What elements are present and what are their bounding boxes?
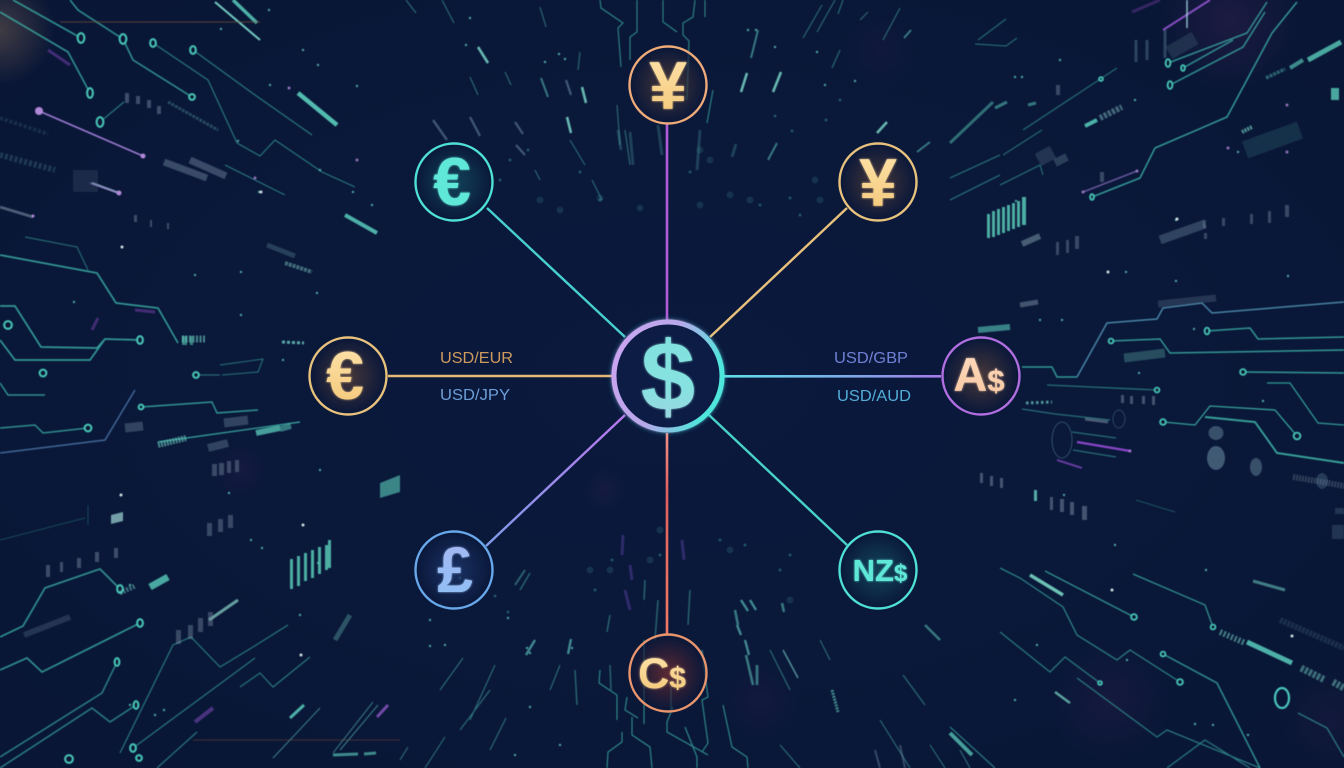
euro symbol: € [433, 144, 471, 220]
label: USD/JPY: USD/JPY [440, 387, 510, 404]
connector: right A$ [724, 375, 941, 378]
background chart bars: right [980, 85, 1344, 539]
hub symbol: $ [641, 321, 695, 431]
NZ$ symbol: NZ$ [853, 553, 908, 588]
perspective data streaks: top [406, 0, 930, 200]
label: USD/AUD: USD/AUD [837, 388, 911, 405]
connector: left euro [388, 375, 612, 377]
background circuit traces: right [950, 2, 1344, 768]
connector: bottom-left pound [486, 415, 625, 546]
background circuit traces: left [0, 0, 355, 768]
background chart bars: left [46, 93, 400, 644]
node: bottom-right NZ$ [840, 532, 916, 608]
label: USD/EUR: USD/EUR [440, 350, 513, 367]
node: right A$ [942, 338, 1020, 414]
connector: top-left euro [487, 208, 625, 337]
connector: top yen [666, 124, 668, 320]
node: left euro [310, 338, 386, 414]
yen symbol: ¥ [859, 145, 897, 221]
pound symbol: £ [437, 534, 473, 606]
connector: bottom-right NZ$ [709, 415, 847, 545]
label: USD/GBP: USD/GBP [834, 350, 908, 367]
node: bottom C$ [630, 634, 706, 712]
node: top-left euro [416, 144, 492, 220]
background ring nodes: left [4, 33, 199, 763]
euro symbol: € [326, 338, 364, 414]
connector: top-right yen [710, 208, 847, 337]
yen symbol: ¥ [649, 48, 687, 124]
background ring nodes: right [1090, 59, 1300, 708]
background circuit traces: bottom centre [599, 640, 748, 768]
node: top yen [630, 46, 706, 124]
background data bars: right [950, 0, 1344, 755]
central hub: US dollar [608, 316, 728, 436]
C$ symbol: C$ [638, 650, 686, 698]
perspective data streaks: bottom [400, 535, 970, 768]
A$ symbol: A$ [953, 348, 1005, 401]
node: bottom-left pound [416, 532, 492, 608]
background circuit traces: top centre [600, 0, 713, 123]
connector: bottom C$ [666, 433, 668, 634]
background data bars: left [0, 0, 400, 758]
node: top-right yen [840, 144, 916, 221]
background purple traces: left [32, 50, 155, 330]
